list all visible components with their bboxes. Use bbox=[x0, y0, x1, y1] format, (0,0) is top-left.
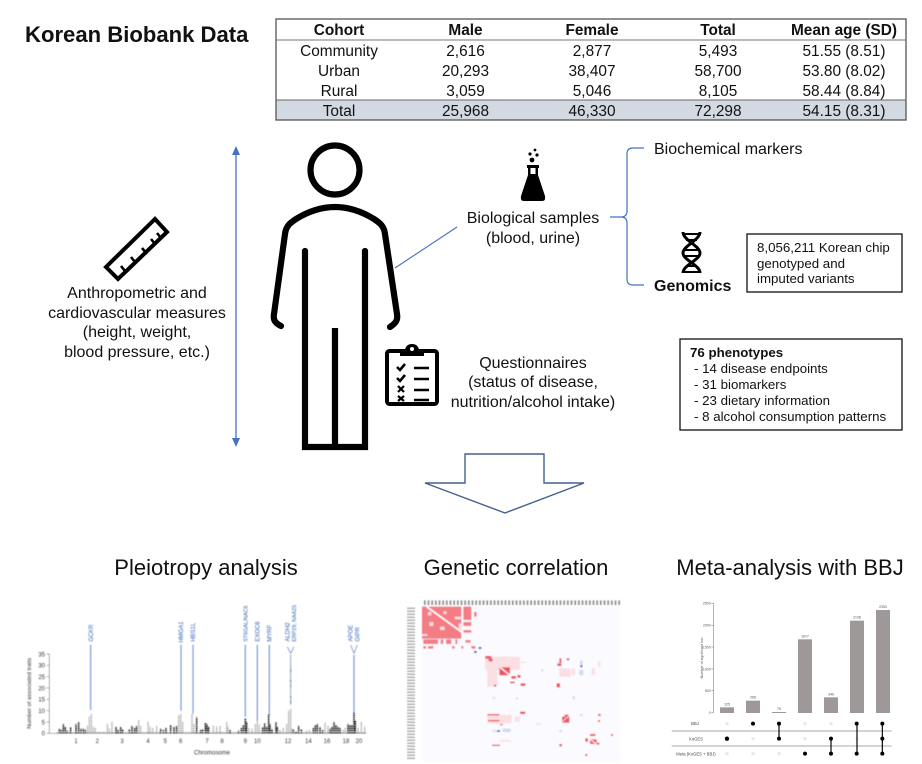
chart: Manhattan pleiotropy plot: HBS1L bbox=[191, 622, 197, 642]
callout: variants: 8,056,211 Korean chip bbox=[757, 240, 890, 255]
chart: Manhattan pleiotropy plot: 18 bbox=[343, 739, 350, 745]
chart: Manhattan pleiotropy plot: 1 bbox=[74, 739, 78, 745]
table: cohort summary: Mean age (SD) bbox=[791, 22, 897, 39]
table: cohort summary: 46,330 bbox=[568, 103, 616, 120]
table: cohort summary: 2,877 bbox=[573, 43, 611, 60]
chart: UpSet meta-analysis: Meta (KoGES + BBJ) bbox=[676, 751, 716, 756]
chart: Manhattan pleiotropy plot: Chromosome bbox=[194, 751, 231, 757]
callout: 76 phenotypes: - 8 alcohol consumption patterns bbox=[694, 409, 887, 424]
table: cohort summary: Total bbox=[700, 22, 736, 39]
table: cohort summary: Total bbox=[323, 103, 355, 120]
text: questionnaires: (status of disease, bbox=[468, 374, 598, 391]
table: cohort summary: Rural bbox=[321, 83, 357, 100]
callout: variants: genotyped and bbox=[757, 256, 845, 271]
chart: Manhattan pleiotropy plot: 10 bbox=[38, 709, 46, 715]
chart: UpSet meta-analysis: 346 bbox=[828, 692, 834, 696]
arrow: big down arrow bbox=[425, 454, 584, 513]
chart: Manhattan pleiotropy plot: ST6GAL/NAC6 bbox=[243, 606, 249, 642]
chart: Manhattan pleiotropy plot: 25 bbox=[38, 675, 46, 681]
callout: 76 phenotypes bbox=[680, 339, 902, 430]
chart: Manhattan pleiotropy plot: 5 bbox=[164, 739, 168, 745]
text: questionnaires: Questionnaires bbox=[479, 355, 587, 372]
table: cohort summary: Male bbox=[448, 22, 483, 39]
chart: UpSet meta-analysis: 1000 bbox=[703, 667, 711, 671]
chart: Manhattan pleiotropy plot: 16 bbox=[324, 739, 331, 745]
chart: Manhattan pleiotropy plot: MYRF bbox=[267, 624, 273, 642]
table: cohort summary: 38,407 bbox=[568, 63, 616, 80]
icon: ruler bbox=[106, 219, 167, 279]
table: cohort summary: 53.80 (8.02) bbox=[802, 63, 886, 80]
chart: UpSet meta-analysis: 0 bbox=[709, 711, 711, 715]
chart: Manhattan pleiotropy plot: 4 bbox=[146, 739, 150, 745]
chart: Manhattan pleiotropy plot: HMGA1 bbox=[179, 621, 185, 643]
title: Korean Biobank Data bbox=[25, 22, 249, 47]
table: cohort summary: 58,700 bbox=[694, 63, 742, 80]
chart: Manhattan pleiotropy plot: 2 bbox=[96, 739, 100, 745]
table: cohort summary: 54.15 (8.31) bbox=[802, 103, 886, 120]
text: questionnaires: nutrition/alcohol intake) bbox=[451, 394, 615, 411]
table: cohort summary: 51.55 (8.51) bbox=[802, 43, 886, 60]
chart: Manhattan pleiotropy plot: 14 bbox=[305, 739, 312, 745]
chart: Manhattan pleiotropy plot: 3 bbox=[120, 739, 124, 745]
chart: Manhattan pleiotropy plot: 15 bbox=[38, 698, 46, 704]
icon: DNA bbox=[683, 232, 700, 273]
chart: UpSet meta-analysis: 1677 bbox=[801, 634, 809, 638]
heading: genetic correlation: Genetic correlation bbox=[424, 555, 608, 580]
chart: UpSet meta-analysis: 2108 bbox=[853, 616, 861, 620]
text: anthropometric measures: blood pressure, etc.) bbox=[64, 344, 210, 361]
chart: UpSet meta-analysis: 2000 bbox=[703, 624, 711, 628]
icon: person outline bbox=[274, 146, 397, 447]
table: cohort summary: 58.44 (8.84) bbox=[802, 83, 886, 100]
chart: UpSet meta-analysis: BBJ bbox=[691, 721, 699, 726]
chart: Manhattan pleiotropy plot: 9 bbox=[244, 739, 248, 745]
table: cohort summary: 8,105 bbox=[699, 83, 737, 100]
icon: clipboard checklist bbox=[387, 344, 437, 404]
table: cohort summary: 20,293 bbox=[442, 63, 489, 80]
table: cohort summary: 3,059 bbox=[446, 83, 485, 100]
text: anthropometric measures: (height, weight, bbox=[83, 324, 191, 341]
table: cohort summary: Cohort bbox=[314, 22, 364, 39]
arrow: body height double arrow bbox=[232, 146, 240, 447]
chart: Manhattan pleiotropy plot: 30 bbox=[38, 664, 46, 670]
chart: UpSet meta-analysis: 2500 bbox=[703, 602, 711, 606]
chart: UpSet meta-analysis: 500 bbox=[705, 689, 711, 693]
text: biological samples: (blood, urine) bbox=[486, 230, 580, 247]
table: cohort summary: 25,968 bbox=[442, 103, 489, 120]
chart: Manhattan pleiotropy plot: 8 bbox=[220, 739, 224, 745]
chart: UpSet meta-analysis bbox=[672, 602, 892, 756]
chart: genetic correlation heatmap bbox=[411, 603, 621, 762]
table: cohort summary: 2,616 bbox=[446, 43, 485, 60]
heading: meta-analysis: Meta-analysis with BBJ bbox=[676, 555, 904, 580]
callout: variants: imputed variants bbox=[757, 271, 855, 286]
text: anthropometric measures: cardiovascular measures bbox=[48, 305, 226, 322]
text: biochemical markers: Biochemical markers bbox=[654, 141, 802, 158]
table: cohort summary: 5,046 bbox=[573, 83, 611, 100]
heading: pleiotropy: Pleiotropy analysis bbox=[114, 555, 298, 580]
table: cohort summary: 5,493 bbox=[699, 43, 737, 60]
callout: 76 phenotypes: - 31 biomarkers bbox=[694, 377, 787, 392]
chart: Manhattan pleiotropy plot: 12 bbox=[285, 739, 292, 745]
bracket bbox=[610, 148, 644, 285]
connector line to biological samples bbox=[395, 227, 457, 268]
text: biological samples: Biological samples bbox=[467, 210, 599, 227]
chart: Manhattan pleiotropy plot: ERP29, NAA25 bbox=[292, 605, 298, 642]
chart: Manhattan pleiotropy plot: 20 bbox=[38, 686, 46, 692]
chart: UpSet meta-analysis: 2353 bbox=[879, 605, 887, 609]
text: genomics: Genomics bbox=[654, 278, 731, 295]
chart: Manhattan pleiotropy plot bbox=[27, 605, 367, 757]
chart: Manhattan pleiotropy plot: APOE bbox=[349, 625, 355, 642]
table: cohort summary: Urban bbox=[318, 63, 360, 80]
chart: Manhattan pleiotropy plot: GCKR bbox=[89, 624, 95, 642]
table: cohort summary bbox=[276, 19, 906, 120]
chart: UpSet meta-analysis: 268 bbox=[750, 696, 756, 700]
icon: flask bbox=[521, 149, 545, 201]
chart: Manhattan pleiotropy plot: Number of associated traits bbox=[27, 658, 33, 729]
chart: Manhattan pleiotropy plot: 10 bbox=[254, 739, 261, 745]
chart: Manhattan pleiotropy plot: GIPR bbox=[355, 626, 361, 642]
table: cohort summary: 72,298 bbox=[694, 103, 742, 120]
chart: Manhattan pleiotropy plot: 35 bbox=[38, 652, 46, 658]
chart: Manhattan pleiotropy plot: ALDH2 bbox=[285, 622, 291, 642]
chart: Manhattan pleiotropy plot: 20 bbox=[356, 739, 363, 745]
text: anthropometric measures: Anthropometric and bbox=[67, 285, 207, 302]
chart: Manhattan pleiotropy plot: 7 bbox=[205, 739, 209, 745]
chart: Manhattan pleiotropy plot: EXOC6 bbox=[255, 621, 261, 642]
callout: 76 phenotypes: - 14 disease endpoints bbox=[694, 361, 828, 376]
callout: 76 phenotypes: 76 phenotypes bbox=[690, 345, 783, 360]
chart: Manhattan pleiotropy plot: 5 bbox=[42, 720, 46, 726]
chart: UpSet meta-analysis: 125 bbox=[724, 702, 730, 706]
chart: UpSet meta-analysis: 1500 bbox=[703, 645, 711, 649]
text: questionnaires bbox=[451, 355, 615, 411]
chart: Manhattan pleiotropy plot: 6 bbox=[179, 739, 183, 745]
table: cohort summary: Female bbox=[565, 22, 619, 39]
chart: UpSet meta-analysis: Number of significant loci bbox=[700, 637, 704, 678]
callout: variants bbox=[747, 234, 902, 292]
chart: Manhattan pleiotropy plot: 0 bbox=[42, 732, 46, 738]
table: cohort summary: Community bbox=[300, 43, 378, 60]
chart: UpSet meta-analysis: 75 bbox=[777, 707, 781, 711]
callout: 76 phenotypes: - 23 dietary information bbox=[694, 393, 830, 408]
text: anthropometric measures bbox=[48, 285, 226, 361]
chart: UpSet meta-analysis: KoGES bbox=[689, 736, 703, 741]
text: biological samples bbox=[467, 210, 599, 247]
